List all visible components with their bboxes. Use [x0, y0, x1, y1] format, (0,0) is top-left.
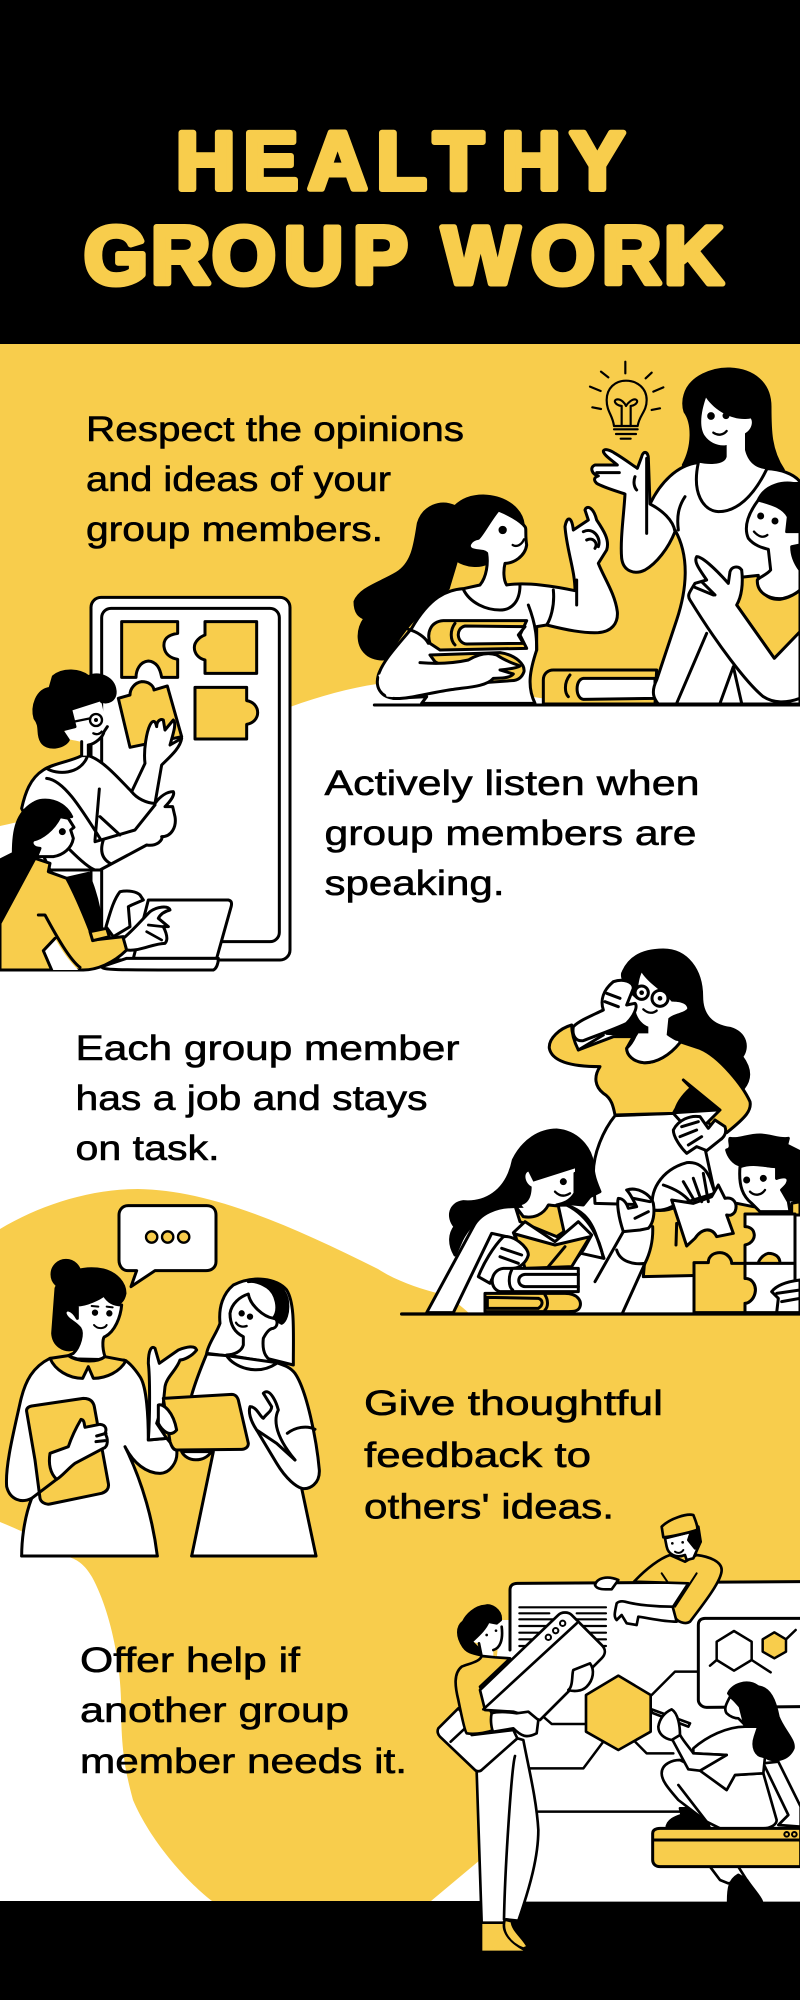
text block: offer help: member needs it. — [80, 1742, 407, 1781]
text block: respect — [86, 410, 464, 549]
platform — [653, 1828, 800, 1902]
illustration: team at digital board — [438, 1515, 800, 1951]
text block: offer help: another group — [80, 1691, 349, 1730]
figure: standing woman — [592, 369, 800, 704]
figure: seated girl reading — [427, 1130, 654, 1313]
figure: boy pointing — [689, 483, 800, 702]
board — [91, 597, 290, 960]
header band — [0, 0, 800, 344]
illustration: two women talking — [6, 1206, 319, 1556]
text block: offer help — [80, 1641, 407, 1781]
figure: boy with puzzle — [643, 1135, 800, 1313]
board — [510, 1582, 800, 1902]
text block: offer help: Offer help if — [80, 1641, 300, 1680]
text block: feedback — [364, 1384, 663, 1526]
table line — [374, 700, 800, 709]
ground edges — [22, 1551, 316, 1560]
figure: woman with pen — [652, 1683, 800, 1828]
illustration: puzzle board team — [0, 597, 290, 970]
title: HEALTHY — [176, 116, 625, 207]
puzzle pieces — [118, 622, 258, 747]
figure: man holding tablets — [438, 1605, 605, 1951]
text block: listen: group members are — [324, 814, 696, 853]
text block: respect: group members. — [86, 510, 383, 549]
figure: man with glasses — [22, 671, 182, 870]
book stack — [485, 1268, 580, 1312]
speech bubble — [119, 1206, 216, 1287]
text block: listen — [324, 764, 700, 903]
icon: lightbulb — [590, 362, 663, 439]
text block: respect: and ideas of your — [86, 460, 391, 499]
text block: feedback: Give thoughtful — [364, 1384, 663, 1423]
text block: feedback: others' ideas. — [364, 1488, 614, 1526]
yellow background blob: lower — [0, 1189, 800, 1901]
illustration: woman, girl and boy with puzzle — [402, 950, 800, 1314]
yellow hexagon — [586, 1676, 651, 1750]
title — [84, 116, 723, 302]
footer band — [0, 1901, 800, 2000]
figure: woman left — [6, 1260, 197, 1556]
text block: listen: Actively listen when — [324, 764, 700, 803]
illustration: students with books and lightbulb — [355, 362, 800, 705]
laptop — [102, 900, 232, 970]
text block: job: on task. — [76, 1129, 220, 1168]
text block: listen: speaking. — [324, 864, 504, 903]
text block: respect: Respect the opinions — [86, 410, 464, 449]
figure: man over board — [595, 1515, 722, 1625]
text block: job: Each group member — [76, 1029, 460, 1068]
chart panel — [698, 1618, 800, 1707]
table line — [402, 1309, 800, 1319]
text block: job — [76, 1029, 460, 1168]
figure: woman with glasses — [549, 950, 750, 1207]
text block: feedback: feedback to — [364, 1436, 591, 1475]
figure: woman right — [192, 1279, 319, 1556]
title: GROUP WORK — [84, 210, 723, 302]
figure: seated girl with books — [355, 496, 617, 703]
yellow background wave: top — [0, 344, 800, 826]
tablet and hand — [158, 1394, 248, 1460]
book on table — [543, 670, 657, 704]
text block: job: has a job and stays — [76, 1079, 428, 1118]
figure: girl at laptop — [0, 800, 143, 970]
